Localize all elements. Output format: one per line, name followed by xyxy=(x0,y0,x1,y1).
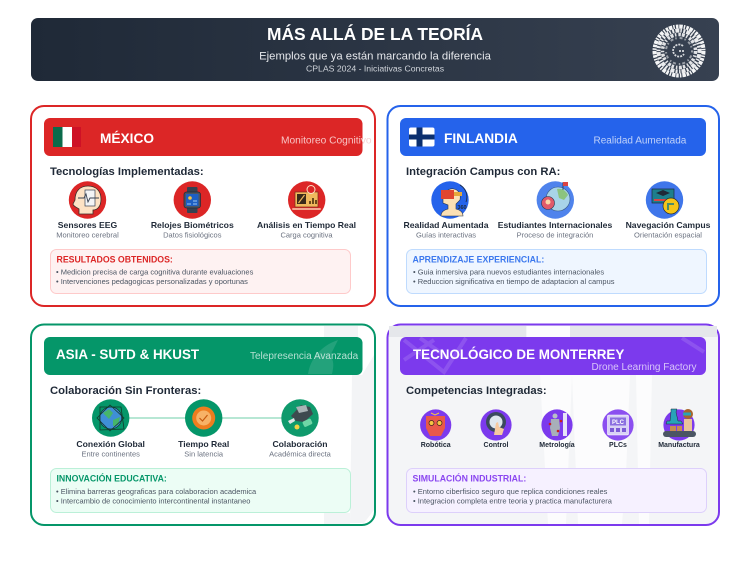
Asia title: ASIA - SUTD & HKUST xyxy=(56,347,200,362)
icon: smartwatch xyxy=(174,181,211,219)
callout: educational innovation: • Elimina barreras geograficas para colaboracion academica xyxy=(56,487,257,496)
callout: results: RESULTADOS OBTENIDOS: xyxy=(56,254,173,264)
section heading: Competencias Integradas: xyxy=(406,385,547,397)
Colaboración label: Colaboración xyxy=(272,439,328,449)
Realidad Aumentada caption: Guías interactivas xyxy=(416,230,476,239)
Sensores EEG label: Sensores EEG xyxy=(58,220,118,230)
icon: flag of Mexico xyxy=(53,127,81,147)
callout: results: • Medicion precisa de carga cognitiva durante evaluaciones xyxy=(56,268,254,277)
callout: educational innovation: INNOVACIÓN EDUCATIVA: xyxy=(56,472,167,484)
callout: experiential learning: • Guia inmersiva para nuevos estudiantes internacionales xyxy=(413,268,604,277)
Control label: Control xyxy=(484,442,508,449)
Finlandia subtitle: Realidad Aumentada xyxy=(594,136,687,146)
icon: robot xyxy=(420,409,451,441)
Análisis en Tiempo Real caption: Carga cognitiva xyxy=(280,230,333,239)
icon: manufacturing worker xyxy=(663,409,696,441)
México header bar xyxy=(44,118,362,156)
México subtitle: Monitoreo Cognitivo xyxy=(281,136,372,146)
icon: collaboration xyxy=(281,399,319,437)
Tiempo Real label: Tiempo Real xyxy=(178,439,229,449)
Monterrey subtitle: Drone Learning Factory xyxy=(592,362,697,373)
callout: industrial simulation: • Integracion completa entre teoria y practica manufacturera xyxy=(413,496,613,505)
México title: MÉXICO xyxy=(100,131,154,146)
Conexión Global caption: Entre continentes xyxy=(82,449,140,458)
panel: Finlandia xyxy=(388,106,719,306)
callout: experiential learning: APRENDIZAJE EXPERIENCIAL: xyxy=(412,254,544,264)
logo: speckled ring xyxy=(654,26,704,76)
event line: CPLAS 2024 - Iniciativas Concretas xyxy=(306,64,445,74)
section heading: Colaboración Sin Fronteras: xyxy=(50,385,201,397)
callout: educational innovation xyxy=(50,468,350,512)
Colaboración caption: Académica directa xyxy=(269,449,332,458)
Estudiantes Internacionales caption: Proceso de integración xyxy=(517,230,593,239)
Metrología label: Metrología xyxy=(539,442,575,449)
panel: Asia xyxy=(31,324,375,525)
connector line xyxy=(110,417,300,419)
Monterrey title: TECNOLÓGICO DE MONTERREY xyxy=(413,347,624,362)
faint background tint xyxy=(324,326,374,524)
PLCs label: PLCs xyxy=(609,442,627,449)
icon: campus navigation xyxy=(646,181,683,219)
Tiempo Real caption: Sin latencia xyxy=(184,449,224,458)
main title: MÁS ALLÁ DE LA TEORÍA xyxy=(267,24,483,44)
header banner xyxy=(31,18,719,81)
Navegación Campus label: Navegación Campus xyxy=(626,220,711,230)
Navegación Campus caption: Orientación espacial xyxy=(634,230,702,239)
icon: PLC panel: PLC xyxy=(612,420,625,426)
callout: industrial simulation: SIMULACIÓN INDUSTRIAL: xyxy=(412,472,526,484)
Relojes Biométricos label: Relojes Biométricos xyxy=(151,220,234,230)
section heading: Integración Campus con RA: xyxy=(406,166,560,178)
Conexión Global label: Conexión Global xyxy=(76,439,145,449)
icon: control xyxy=(480,409,512,441)
Realidad Aumentada label: Realidad Aumentada xyxy=(404,220,489,230)
section heading: Tecnologías Implementadas: xyxy=(50,166,204,178)
Análisis en Tiempo Real label: Análisis en Tiempo Real xyxy=(257,220,356,230)
callout: experiential learning xyxy=(406,250,706,294)
Manufactura label: Manufactura xyxy=(658,442,700,449)
icon: real-time analysis laptop xyxy=(288,181,325,219)
Finlandia header bar xyxy=(400,118,706,156)
Relojes Biométricos caption: Datos fisiológicos xyxy=(163,230,222,239)
panel: México xyxy=(31,106,375,306)
Sensores EEG caption: Monitoreo cerebral xyxy=(56,230,119,239)
icon: flag of Finland xyxy=(409,128,434,146)
icon: EEG head xyxy=(69,181,106,219)
subtitle: Ejemplos que ya están marcando la diferencia xyxy=(259,50,492,62)
callout: results: • Intervenciones pedagogicas personalizadas y oportunas xyxy=(56,277,248,286)
callout: educational innovation: • Intercambio de conocimiento intercontinental instantaneo xyxy=(56,496,250,505)
callout: industrial simulation: • Entorno ciberfisico seguro que replica condiciones reales xyxy=(413,487,608,496)
icon: globe with student xyxy=(537,181,574,219)
faint background tint xyxy=(389,326,717,337)
callout: results xyxy=(50,250,350,294)
Estudiantes Internacionales label: Estudiantes Internacionales xyxy=(498,220,612,230)
icon: PLC panel xyxy=(602,409,634,441)
icon: real time clock xyxy=(185,399,222,437)
icon: metrology xyxy=(541,409,573,441)
Asia subtitle: Telepresencia Avanzada xyxy=(250,351,359,362)
Asia header bar xyxy=(44,337,362,375)
panel: Tecnológico de Monterrey xyxy=(388,324,719,525)
icon: global connection xyxy=(92,399,129,437)
callout: experiential learning: • Reduccion significativa en tiempo de adaptacion al campus xyxy=(413,277,615,286)
Finlandia title: FINLANDIA xyxy=(444,131,518,146)
Monterrey header bar xyxy=(400,337,706,375)
icon: VR headset: 360 xyxy=(457,205,467,211)
Robótica label: Robótica xyxy=(421,442,451,449)
callout: industrial simulation xyxy=(406,468,706,512)
icon: VR headset xyxy=(431,181,469,219)
